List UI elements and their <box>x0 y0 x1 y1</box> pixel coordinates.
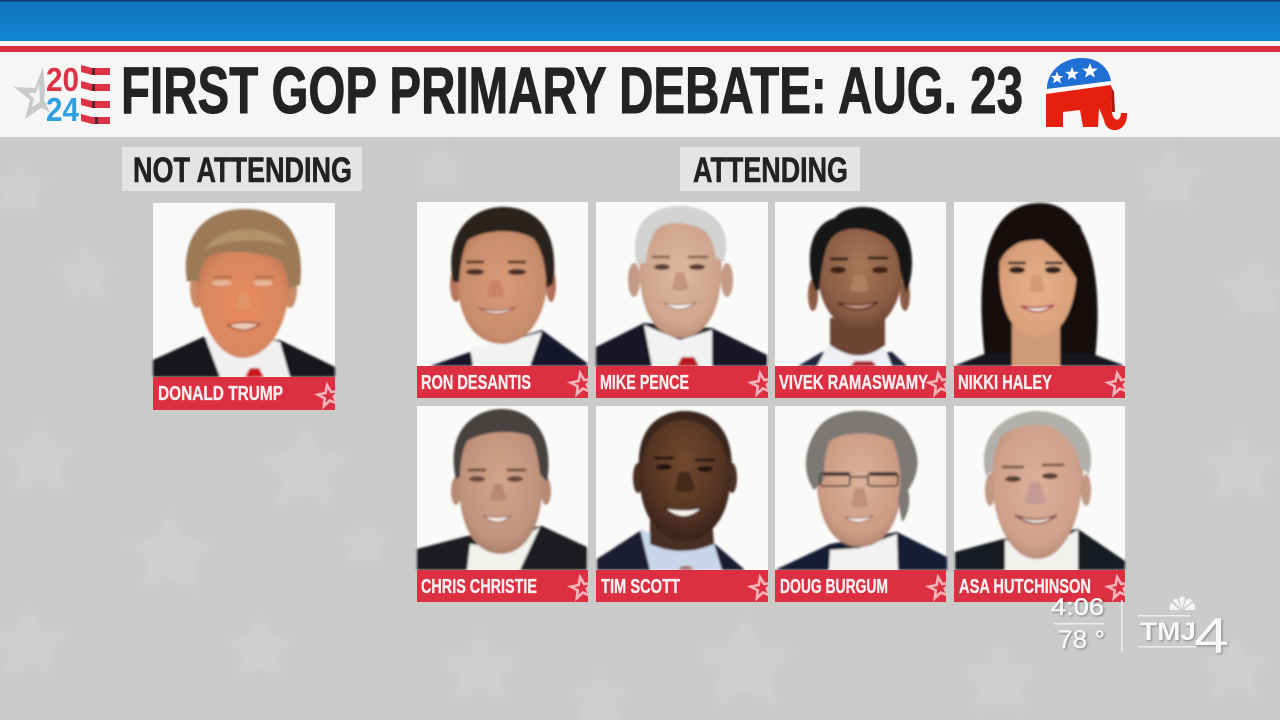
name label <box>775 366 952 398</box>
panel: Doug Burgum <box>775 406 952 602</box>
heading: not attending: NOT ATTENDING <box>133 151 352 190</box>
icon: GOP elephant <box>1046 58 1127 130</box>
portrait: Christie <box>417 409 587 570</box>
name label <box>954 570 1131 602</box>
top blue band <box>0 0 1280 41</box>
2024 logo: 20 <box>46 61 79 98</box>
name label: NIKKI HALEY <box>958 372 1052 394</box>
name label: RON DESANTIS <box>421 372 531 394</box>
name label <box>596 366 774 398</box>
name label: CHRIS CHRISTIE <box>421 576 537 598</box>
panel: Ron DeSantis <box>417 202 594 398</box>
title banner <box>0 41 1280 137</box>
icon: peacock <box>1170 596 1195 610</box>
name label <box>596 570 774 602</box>
time and temperature <box>1051 594 1105 654</box>
name label: ASA HUTCHINSON <box>959 576 1091 598</box>
portrait: Ramaswamy <box>798 207 912 366</box>
name label <box>954 366 1131 398</box>
panel: Mike Pence <box>596 202 774 398</box>
name label: MIKE PENCE <box>600 372 689 394</box>
portrait: Trump <box>153 209 335 377</box>
panel: Chris Christie <box>417 406 594 602</box>
panel: Donald Trump <box>153 203 341 410</box>
TMJ4 station logo: TMJ <box>1140 618 1196 646</box>
name label: DOUG BURGUM <box>780 576 888 598</box>
portrait: Pence <box>596 206 767 366</box>
panel: Vivek Ramaswamy <box>775 202 952 398</box>
TMJ4 station logo <box>1121 596 1229 664</box>
portrait: Scott <box>597 411 744 570</box>
time and temperature: 4:06 <box>1051 594 1104 621</box>
heading: attending: ATTENDING <box>693 151 848 190</box>
2024 logo <box>14 61 110 128</box>
portrait: Haley <box>954 203 1123 366</box>
name label: VIVEK RAMASWAMY <box>779 372 928 394</box>
panel: Nikki Haley <box>954 202 1131 398</box>
name label <box>153 377 341 410</box>
name label <box>417 570 594 602</box>
portrait: Burgum <box>777 411 947 570</box>
name label <box>417 366 594 398</box>
name label <box>775 570 952 602</box>
portrait: DeSantis <box>430 207 587 366</box>
name label: TIM SCOTT <box>601 576 680 598</box>
TMJ4 station logo: 4 <box>1194 608 1229 664</box>
2024 logo: 24 <box>46 91 80 128</box>
panel: Tim Scott <box>596 406 774 602</box>
time and temperature: 78 ° <box>1058 626 1105 654</box>
portrait: Hutchinson <box>955 411 1125 570</box>
name label: DONALD TRUMP <box>158 383 283 405</box>
panel: Asa Hutchinson <box>954 406 1131 602</box>
